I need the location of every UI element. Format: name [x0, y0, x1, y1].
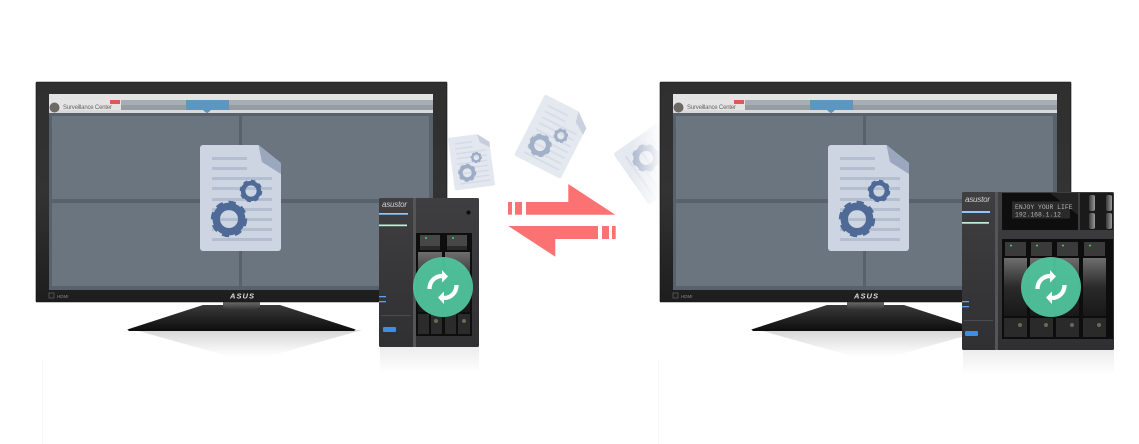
floating document: middle	[514, 94, 592, 179]
status lights	[962, 211, 990, 336]
bezel labels: ASUS	[853, 292, 878, 300]
monitor stand shadow	[135, 330, 362, 356]
sync badge	[1021, 257, 1081, 317]
monitor neck	[223, 300, 260, 311]
faint guide line left	[42, 360, 43, 444]
NAS: two-bay	[379, 198, 479, 373]
monitor neck	[847, 300, 884, 311]
arrow: pointing left	[508, 226, 616, 257]
brand: asustor	[965, 195, 990, 204]
NAS: four-bay	[962, 192, 1114, 374]
bezel labels	[49, 292, 254, 300]
arrow: pointing right	[508, 184, 615, 215]
drive bays	[416, 233, 472, 336]
brand: asustor	[382, 200, 407, 209]
screen	[673, 94, 1057, 290]
floating document: small, left	[448, 133, 495, 191]
bezel labels: HDMI	[57, 294, 68, 299]
monitor stand shadow	[759, 330, 986, 356]
bezel labels	[673, 292, 878, 300]
faint guide line right	[658, 360, 659, 444]
monitor stand base	[127, 305, 356, 331]
monitor bezel	[660, 82, 1071, 302]
document on right screen	[828, 145, 909, 251]
document on left screen	[200, 145, 281, 251]
drive bays	[1002, 239, 1113, 339]
status lights	[379, 213, 408, 332]
LCD panel	[1002, 193, 1078, 230]
NAS body	[379, 198, 479, 347]
monitor stand base	[751, 305, 980, 331]
screen	[49, 94, 433, 290]
screen: Surveillance Center	[63, 105, 112, 111]
bezel labels: ASUS	[229, 292, 254, 300]
LCD buttons	[1080, 193, 1113, 230]
NAS reflection	[963, 350, 1114, 374]
NAS body	[962, 192, 1114, 350]
screen: Surveillance Center	[687, 105, 736, 111]
monitor bezel	[36, 82, 447, 302]
LCD panel: 192.168.1.12	[1015, 212, 1061, 218]
bezel labels: HDMI	[681, 294, 692, 299]
sync badge	[413, 257, 473, 317]
monitor: left	[36, 82, 447, 356]
NAS reflection	[380, 347, 479, 373]
floating document: fading into right monitor	[613, 107, 716, 205]
monitor: right	[660, 82, 1071, 356]
LCD panel: ENJOY YOUR LIFE	[1015, 204, 1073, 211]
power button	[466, 210, 470, 214]
